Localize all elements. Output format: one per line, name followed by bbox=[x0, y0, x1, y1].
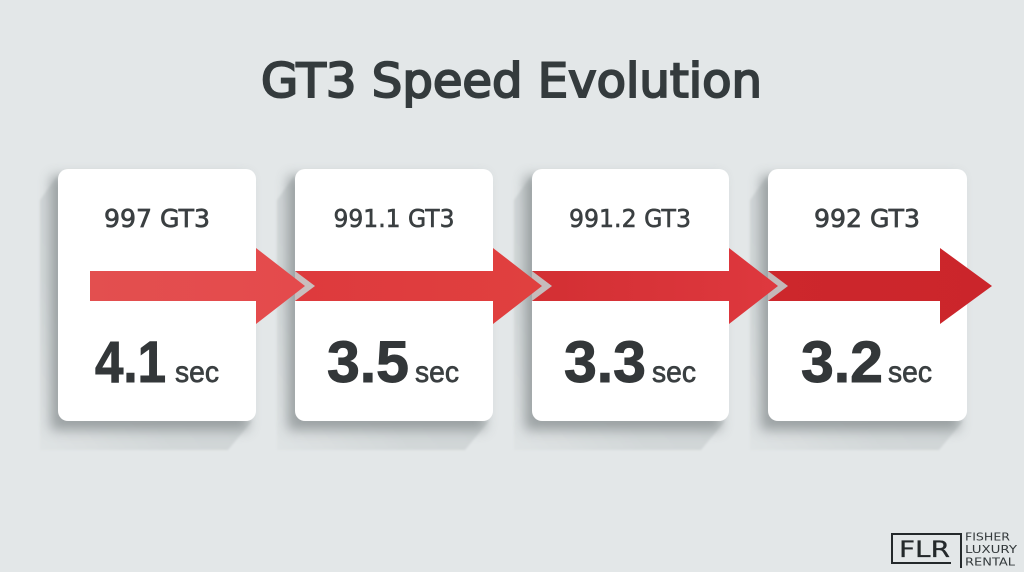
arrow 4 bbox=[768, 248, 992, 324]
card bbox=[295, 169, 493, 421]
arrow 3 bbox=[532, 248, 788, 324]
card bbox=[58, 169, 256, 421]
time value: 3.5 bbox=[327, 330, 409, 395]
panel: 991.1 GT3 bbox=[277, 169, 493, 450]
card bbox=[532, 169, 729, 421]
panel: 992 GT3 bbox=[750, 169, 967, 450]
model label: 991.1 GT3 bbox=[334, 204, 454, 233]
logo: Fisher Luxury Rental bbox=[892, 532, 1018, 568]
model label: 992 GT3 bbox=[814, 204, 920, 233]
logo wordmark: FISHER bbox=[965, 532, 1010, 544]
logo wordmark: LUXURY bbox=[965, 544, 1018, 556]
arrow 1 bbox=[90, 248, 315, 324]
time value: 3.3 bbox=[564, 330, 646, 395]
time value: 3.2 bbox=[801, 330, 883, 395]
logo letters: FLR bbox=[899, 537, 950, 563]
logo wordmark: RENTAL bbox=[965, 556, 1015, 568]
model label: 991.2 GT3 bbox=[569, 204, 691, 233]
model label: 997 GT3 bbox=[104, 204, 210, 233]
title: GT3 Speed Evolution bbox=[261, 54, 762, 109]
logo frame bbox=[892, 534, 961, 568]
time unit: sec bbox=[415, 356, 459, 389]
time unit: sec bbox=[652, 356, 696, 389]
time value: 4.1 bbox=[95, 330, 166, 395]
card bbox=[768, 169, 967, 421]
time unit: sec bbox=[888, 356, 932, 389]
logo wordmark bbox=[965, 532, 1018, 568]
arrow 2 bbox=[295, 248, 552, 324]
panel: 997 GT3 bbox=[40, 169, 256, 450]
panel: 991.2 GT3 bbox=[514, 169, 729, 450]
time unit: sec bbox=[175, 356, 219, 389]
